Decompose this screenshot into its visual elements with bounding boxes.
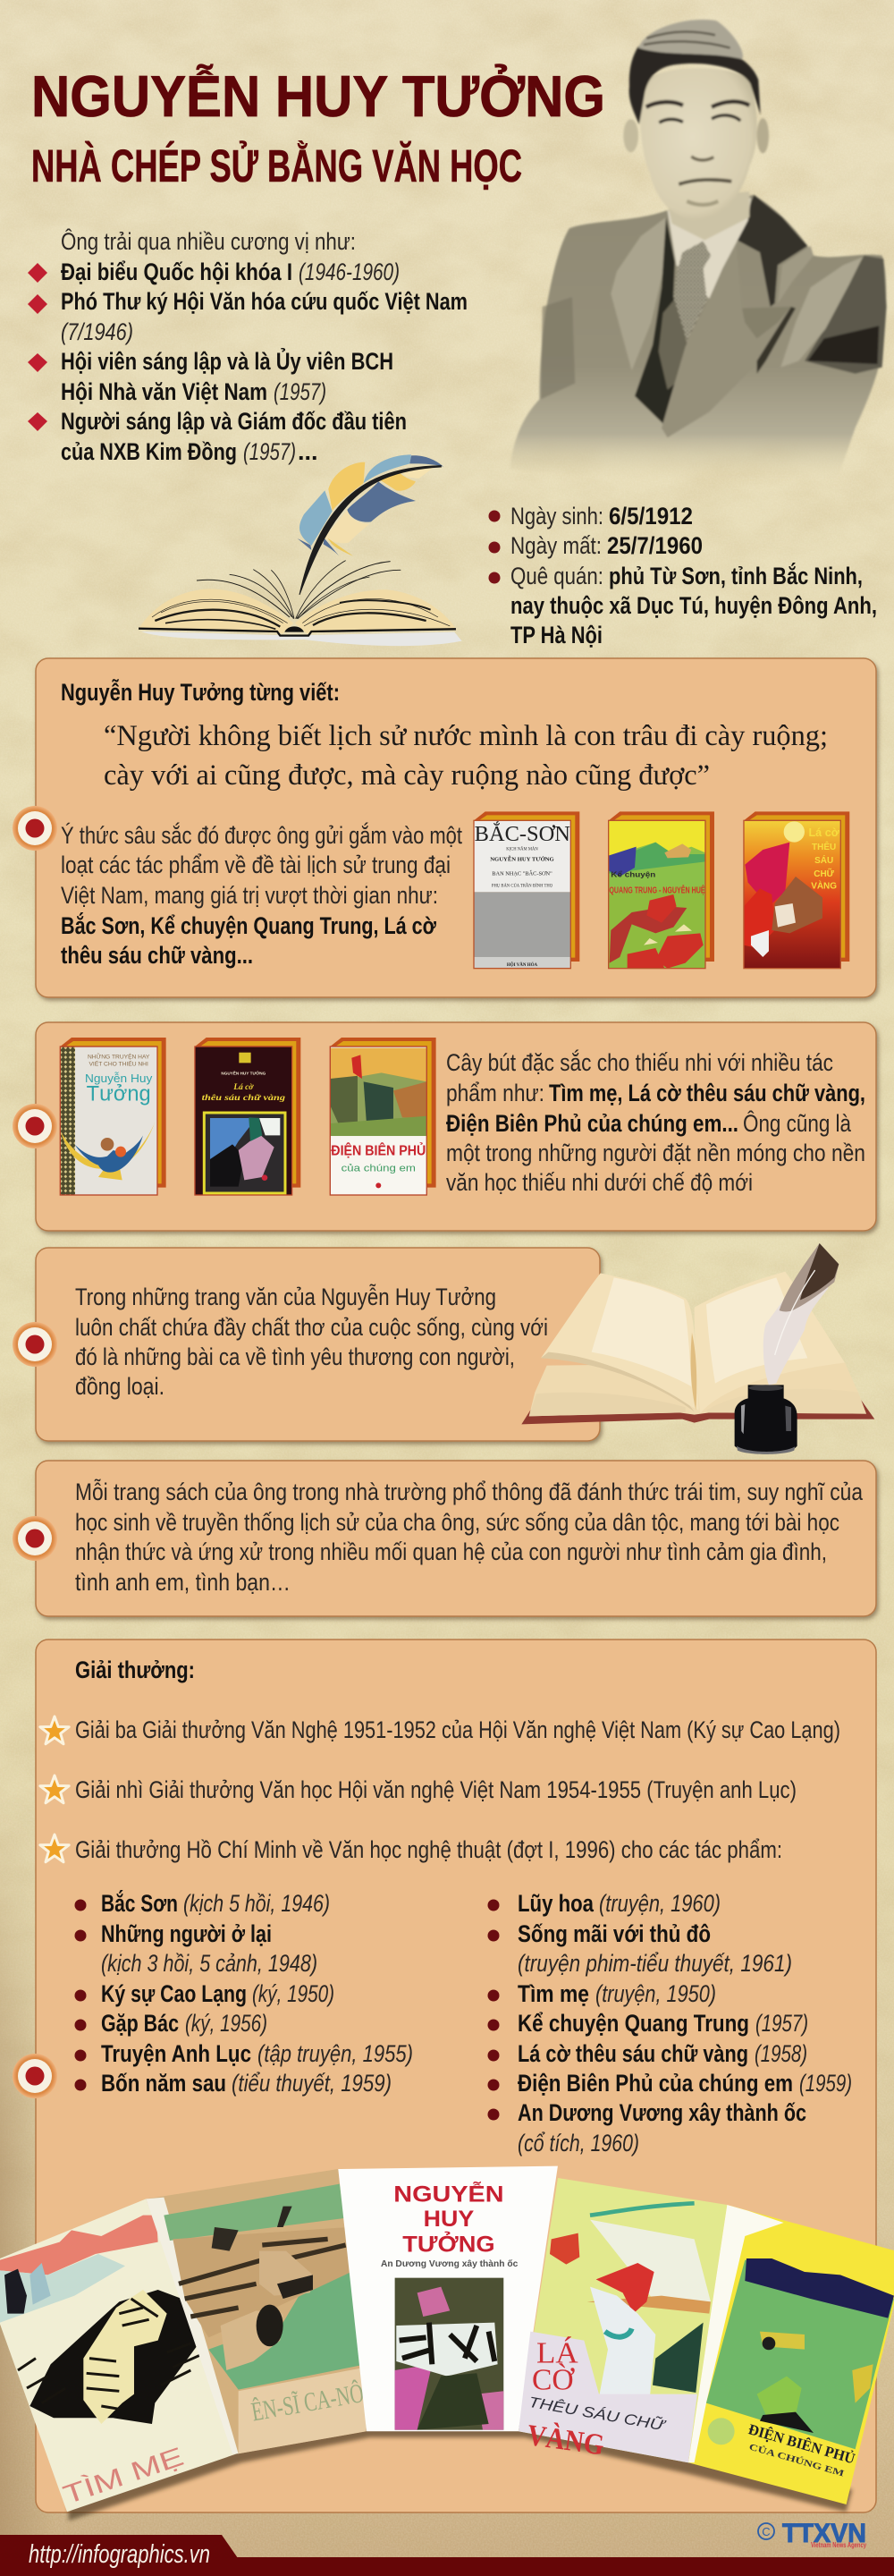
panel: quote and historical works	[36, 658, 876, 997]
works list: left column: Truyện Anh Lục	[101, 2040, 251, 2067]
book cover: Lá cờ thêu sáu chữ vàng, Kim Đồng edition: Lá cờ	[232, 1083, 254, 1092]
book cover: Kể chuyện Quang Trung: Kể chuyện	[611, 870, 655, 879]
panel heading: awards: Giải thưởng:	[75, 1657, 195, 1683]
cover: Lá cờ thêu sáu chữ vàng (old edition): THÊU SÁU CHỮ	[527, 2393, 668, 2435]
text block: positions held: Hội viên sáng lập và là Ủy viên BCH	[61, 346, 393, 375]
book cover: Nguyễn Huy Tưởng	[60, 1038, 166, 1195]
works list: left column: Bắc Sơn	[101, 1889, 178, 1917]
text block: positions held: Đại biểu Quốc hội khóa I	[61, 258, 292, 285]
works list: right column: Sống mãi với thủ đô	[518, 1920, 711, 1947]
text block: positions held: (7/1946)	[61, 318, 133, 345]
book cover: Điện Biên Phủ của chúng em: của chúng em	[342, 1163, 416, 1174]
works list: left column: Gặp Bác	[101, 2010, 179, 2037]
portrait photo	[510, 20, 887, 479]
icon: open book with quill and inkwell	[521, 1243, 874, 1454]
text block: school textbooks: tình anh em, tình bạn…	[75, 1569, 291, 1596]
subtitle: NHÀ CHÉP SỬ BẰNG VĂN HỌC	[31, 140, 522, 191]
text block: poetry in his writing: Trong những trang văn của Nguyễn Huy Tưởng	[75, 1283, 496, 1310]
panel: awards	[36, 1640, 876, 2512]
text block: children's literature: Ông cũng là	[743, 1109, 852, 1137]
works list: right column: (1959)	[799, 2070, 852, 2097]
cover: An Dương Vương xây thành ốc	[338, 2166, 558, 2431]
cover: boat story: ÊN-SĨ CA-NÔ	[249, 2378, 366, 2428]
works list: left column: (kịch 3 hồi, 5 cảnh, 1948)	[101, 1950, 317, 1977]
text block: positions held: Hội Nhà văn Việt Nam	[61, 378, 267, 405]
text block: biography facts	[488, 503, 877, 648]
text block: children's literature: Điện Biên Phủ của chúng em...	[446, 1110, 738, 1137]
panel heading: Nguyễn Huy Tưởng từng viết:	[61, 678, 340, 706]
panel: children's literature	[36, 1022, 876, 1231]
works list: left column: (ký, 1956)	[185, 2010, 267, 2037]
cover: Điện Biên Phủ của chúng em (old edition): CỦA CHÚNG EM	[747, 2442, 846, 2479]
works list: right column	[488, 1890, 852, 2157]
text block: children's literature: văn học thiếu nhi dưới chế độ mới	[446, 1169, 753, 1196]
works list: left column: (tiểu thuyết, 1959)	[232, 2070, 392, 2097]
text block: children's literature: phẩm như:	[446, 1080, 544, 1106]
works list: right column: (cổ tích, 1960)	[518, 2130, 639, 2157]
works list: right column: (1958)	[755, 2040, 807, 2067]
works list: right column: An Dương Vương xây thành ốc	[518, 2099, 806, 2126]
text block: biography facts: 6/5/1912	[609, 503, 693, 530]
book cover: Lá cờ thêu sáu chữ vàng: SÁU	[814, 854, 833, 866]
text block: poetry in his writing	[75, 1283, 548, 1400]
text block: children's literature	[446, 1048, 865, 1196]
text block: positions held: (1957)	[243, 438, 296, 465]
works list: right column: Kể chuyện Quang Trung	[518, 2010, 749, 2037]
text block: historical works: Bắc Sơn, Kể chuyện Quang Trung, Lá cờ	[61, 911, 437, 939]
book cover: Nguyễn Huy Tưởng: VIẾT CHO THIẾU NHI	[89, 1058, 148, 1067]
book cover: Bắc Sơn: KỊCH NĂM MÀN	[506, 847, 538, 852]
cover: Lá cờ thêu sáu chữ vàng (old edition): LÁ	[536, 2337, 578, 2370]
cover: boat story	[146, 2169, 367, 2453]
book cover: Lá cờ thêu sáu chữ vàng: CHỮ	[814, 868, 835, 879]
text block: positions held: của NXB Kim Đồng	[61, 438, 237, 465]
book cover: Bắc Sơn: BAN NHẠC "BẮC-SƠN"	[492, 869, 552, 877]
text block: historical works	[61, 821, 462, 969]
book cover: Lá cờ thêu sáu chữ vàng: Lá cờ	[808, 826, 839, 839]
text block: biography facts: Ngày mất:	[510, 532, 602, 559]
cover: An Dương Vương xây thành ốc: An Dương Vương xây thành ốc	[381, 2258, 519, 2269]
book cover: Bắc Sơn: NGUYỄN HUY TƯỞNG	[490, 856, 554, 863]
text block: poetry in his writing: đó là những bài ca về tình yêu thương con người,	[75, 1343, 515, 1370]
text block: historical works: Việt Nam, mang giá trị vượt thời gian như:	[61, 882, 438, 909]
works list: left column: Ký sự Cao Lạng	[101, 1980, 247, 2007]
bullet medallion 1	[13, 806, 57, 851]
works list: right column: Điện Biên Phủ của chúng em	[518, 2070, 793, 2097]
works list: right column: Tìm mẹ	[518, 1980, 589, 2007]
book cover: Nguyễn Huy Tưởng: Nguyễn Huy	[85, 1072, 153, 1085]
book cover: Lá cờ thêu sáu chữ vàng	[744, 811, 849, 969]
book cover fan	[0, 2166, 894, 2521]
book cover: Điện Biên Phủ của chúng em: ĐIỆN BIÊN PHỦ	[331, 1142, 426, 1158]
book cover: Bắc Sơn	[474, 811, 579, 969]
book cover: Kể chuyện Quang Trung: QUANG TRUNG - NGUYỄN HUỆ	[609, 884, 705, 895]
cover: An Dương Vương xây thành ốc: HUY	[424, 2207, 474, 2232]
footer band	[0, 2535, 894, 2576]
book cover: Bắc Sơn: HỘI VĂN HÓA	[507, 962, 538, 968]
logo: TTXVN: Vietnam News Agency	[811, 2541, 866, 2549]
cover: An Dương Vương xây thành ốc: NGUYỄN	[393, 2181, 504, 2207]
works list: left column: Những người ở lại	[101, 1920, 272, 1947]
book cover: Lá cờ thêu sáu chữ vàng, Kim Đồng edition: thêu sáu chữ vàng	[202, 1094, 285, 1103]
book cover: Lá cờ thêu sáu chữ vàng: THÊU	[812, 841, 836, 852]
text block: poetry in his writing: đồng loại.	[75, 1373, 164, 1400]
text block: historical works: loạt các tác phẩm về đề tài lịch sử trung đại	[61, 852, 451, 878]
book cover: Lá cờ thêu sáu chữ vàng: VÀNG	[811, 879, 837, 891]
book cover: Kể chuyện Quang Trung	[609, 811, 714, 969]
works list: right column: (truyện, 1960)	[599, 1890, 721, 1917]
bullet medallion 5	[13, 2054, 57, 2098]
text block: positions held: Người sáng lập và Giám đốc đầu tiên	[61, 408, 407, 435]
works list: right column: (truyện, 1950)	[595, 1980, 716, 2007]
book cover: Nguyễn Huy Tưởng: NHỮNG TRUYỆN HAY	[88, 1052, 150, 1060]
book cover: Bắc Sơn: PHỤ BẢN CỦA TRẦN ĐÌNH THỌ	[492, 883, 553, 888]
text block: biography facts: Ngày sinh:	[510, 503, 603, 530]
works list: right column: Lá cờ thêu sáu chữ vàng	[518, 2040, 748, 2067]
cover: An Dương Vương xây thành ốc: TƯỞNG	[402, 2230, 495, 2257]
bullet medallion 3	[13, 1322, 57, 1367]
logo: TTXVN: C	[762, 2525, 771, 2538]
works list: left column	[75, 1889, 413, 2097]
quote: cày với ai cũng được, mà cày ruộng nào cũng được”	[104, 759, 710, 792]
text block: children's literature: Cây bút đặc sắc cho thiếu nhi với nhiều tác	[446, 1048, 833, 1076]
cover: Điện Biên Phủ của chúng em (old edition)	[688, 2205, 894, 2504]
title: NGUYỄN HUY TƯỞNG	[31, 64, 605, 129]
footer url: http://infographics.vn	[29, 2540, 210, 2569]
panel: poetry in his writing	[36, 1248, 600, 1441]
icon: feather and open book	[139, 454, 462, 646]
book cover: Nguyễn Huy Tưởng: Tưởng	[87, 1082, 151, 1106]
book cover: Bắc Sơn: BẮC-SƠN	[475, 822, 570, 846]
cover shadows	[69, 2424, 852, 2521]
works list: right column: (truyện phim-tiểu thuyết, 1961)	[518, 1950, 792, 1977]
text block: biography facts: TP Hà Nội	[510, 622, 603, 648]
text block: positions held	[28, 227, 468, 465]
cover: Lá cờ thêu sáu chữ vàng (old edition): CỜ	[532, 2363, 576, 2397]
bullet medallion 2	[13, 1104, 57, 1148]
works list: left column: (tập truyện, 1955)	[257, 2040, 413, 2067]
works list: right column: (1957)	[755, 2010, 808, 2037]
cover: Tìm mẹ	[0, 2199, 237, 2512]
text block: historical works: Ý thức sâu sắc đó được ông gửi gắm vào một	[61, 821, 462, 849]
book cover: Lá cờ thêu sáu chữ vàng, Kim Đồng edition	[195, 1038, 300, 1195]
text block: positions held: Phó Thư ký Hội Văn hóa cứu quốc Việt Nam	[61, 288, 468, 315]
quote: “Người không biết lịch sử nước mình là con trâu đi cày ruộng;	[104, 720, 828, 752]
quote	[104, 720, 828, 792]
cover: Điện Biên Phủ của chúng em (old edition): ĐIỆN BIÊN PHỦ	[746, 2420, 857, 2467]
cover: Tìm mẹ: TÌM MẸ	[60, 2442, 188, 2511]
text block: biography facts: Quê quán:	[510, 563, 603, 589]
cover: Lá cờ thêu sáu chữ vàng (old edition)	[519, 2178, 727, 2462]
book cover: Lá cờ thêu sáu chữ vàng, Kim Đồng edition: NGUYỄN HUY TƯỞNG	[221, 1070, 266, 1075]
text block: school textbooks	[75, 1478, 864, 1596]
text block: historical works: thêu sáu chữ vàng...	[61, 942, 253, 969]
works list: left column: (ký, 1950)	[252, 1980, 334, 2007]
bullet medallion 4	[13, 1516, 57, 1561]
works list: right column: Lũy hoa	[518, 1890, 595, 1917]
text block: biography facts: 25/7/1960	[607, 532, 703, 559]
cover: Lá cờ thêu sáu chữ vàng (old edition): VÀNG	[525, 2419, 606, 2462]
text block: positions held: (1957)	[274, 378, 326, 405]
logo: TTXVN: TTXVN	[782, 2519, 866, 2548]
panel: school textbooks	[36, 1461, 876, 1616]
text block: positions held: (1946-1960)	[299, 258, 400, 285]
text block: positions held: Ông trải qua nhiều cương vị như:	[61, 227, 356, 255]
book cover: Điện Biên Phủ của chúng em	[330, 1038, 436, 1195]
works list: left column: Bốn năm sau	[101, 2070, 226, 2097]
works list: left column: (kịch 5 hồi, 1946)	[183, 1890, 330, 1917]
text block: poetry in his writing: luôn chất chứa đầy chất thơ của cuộc sống, cùng với	[75, 1314, 548, 1341]
text block: positions held: ...	[298, 438, 318, 465]
